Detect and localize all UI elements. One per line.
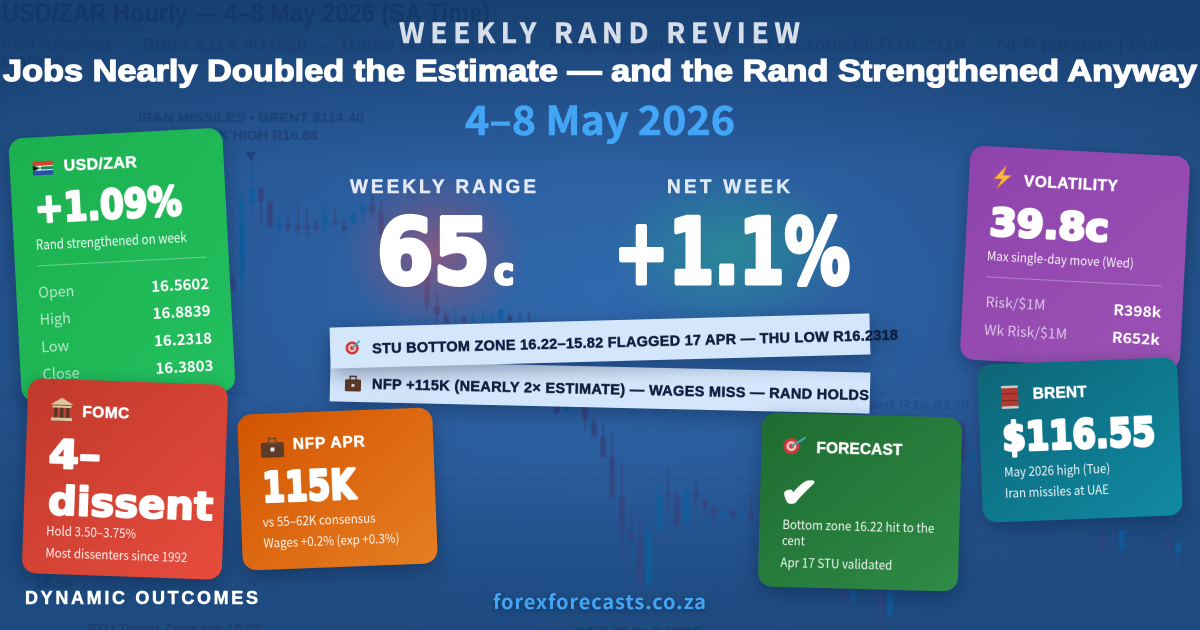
strip: STU bottom zone	[330, 313, 898, 369]
panel: Brent	[977, 357, 1183, 523]
Brent label: BRENT	[1032, 384, 1088, 403]
FOMC value line 2: dissent	[47, 479, 214, 530]
USD/ZAR label: USD/ZAR	[63, 154, 138, 175]
chart axis label: 16.30	[35, 575, 72, 591]
STU text: STU BOTTOM ZONE 16.22–15.82 FLAGGED 17 APR — THU LOW R16.2318	[372, 328, 898, 357]
icon: target	[345, 341, 360, 355]
panel: FOMC	[22, 378, 228, 580]
brand: dynamic outcomes: DYNAMIC OUTCOMES	[25, 588, 258, 608]
volatility table: R398k	[1113, 299, 1162, 323]
icon: briefcase	[261, 438, 284, 458]
volatility label: VOLATILITY	[1023, 173, 1119, 195]
stat: weekly range	[350, 177, 536, 305]
date: 4–8 May 2026	[465, 89, 735, 147]
chart annotation: right edge: nis	[1178, 461, 1200, 476]
forecast detail line 2: cent	[782, 530, 805, 550]
chart subtitle: Iran missiles → Brent $114.40 high → Trump de-escalation → FOMC dissent ruling → STU zone hit R16.2318 → NFP paradox | Source:	[1, 35, 1197, 54]
USD/ZAR table: Close	[42, 362, 80, 385]
footer url: forexforecasts.co.za	[493, 586, 706, 615]
stat: net week	[614, 177, 850, 305]
chart source: OANDA	[1, 52, 66, 71]
NFP detail 1: vs 55–62K consensus	[262, 508, 376, 531]
USD/ZAR table: 16.2318	[153, 327, 213, 351]
FOMC value line 1: 4–	[48, 432, 102, 479]
volatility table: R652k	[1111, 327, 1161, 350]
chart annotation: week high: WK HIGH R16.88	[205, 127, 318, 143]
USD/ZAR table	[38, 273, 214, 385]
chart annotation: iran missiles: IRAN MISSILES • BRENT $114.40	[138, 110, 364, 125]
USD/ZAR table: Low	[41, 335, 70, 357]
NFP label: NFP APR	[292, 433, 365, 453]
forecast detail line 1: Bottom zone 16.22 hit to the	[782, 514, 935, 537]
forecast detail line 3: Apr 17 STU validated	[780, 552, 893, 574]
net week label: NET WEEK	[667, 177, 790, 198]
FOMC detail 1: Hold 3.50–3.75%	[46, 520, 136, 542]
NFP value: 115K	[261, 460, 358, 512]
chart annotation: right edge 2: d	[1183, 479, 1191, 494]
weekly range value: 65	[377, 200, 490, 305]
glow behind net week	[607, 170, 857, 330]
USD/ZAR table: Open	[38, 280, 75, 303]
icon: South African flag	[32, 160, 53, 176]
NFP detail 2: Wages +0.2% (exp +0.3%)	[263, 528, 400, 552]
bullish candles	[242, 165, 1178, 615]
volatility table	[984, 292, 1162, 350]
USD/ZAR table: 16.3803	[155, 355, 214, 379]
NFP text: NFP +115K (NEARLY 2× ESTIMATE) — WAGES MISS — RAND HOLDS	[372, 377, 869, 404]
kicker: weekly rand review: WEEKLY RAND REVIEW	[399, 12, 800, 52]
icon: lightning bolt	[994, 165, 1012, 190]
Brent detail 2: Iran missiles at UAE	[1005, 479, 1109, 502]
panel: NFP APR	[237, 407, 438, 571]
weekly range label: WEEKLY RANGE	[350, 177, 536, 198]
USD/ZAR change: +1.09%	[34, 179, 183, 232]
weekly range unit: c	[494, 252, 514, 293]
icon: target	[783, 437, 806, 455]
chart annotation: closed: Closed R16.5136	[840, 397, 970, 412]
USD/ZAR table: 16.5602	[151, 273, 210, 297]
Brent value: $116.55	[1002, 410, 1156, 461]
Brent detail 1: May 2026 high (Tue)	[1004, 458, 1110, 481]
panel: USD/ZAR	[8, 128, 236, 402]
icon: bank	[50, 397, 74, 421]
headline: Jobs Nearly Doubled the Estimate — and the Rand Strengthened Anyway	[3, 53, 1198, 88]
USD/ZAR table: 16.8839	[152, 300, 211, 324]
bearish candles	[233, 188, 1168, 630]
icon: briefcase	[345, 376, 361, 392]
USD/ZAR caption: Rand strengthened on week	[35, 227, 187, 255]
FOMC label: FOMC	[82, 404, 130, 423]
icon: oil barrel	[1001, 385, 1019, 409]
glow behind weekly range	[343, 170, 527, 334]
chart marker: high	[246, 152, 256, 162]
strip: NFP headline	[330, 360, 870, 414]
chart annotation: close: Close R16.38	[1090, 530, 1178, 545]
FOMC detail 2: Most dissenters since 1992	[45, 542, 188, 566]
panel: forecast	[758, 412, 962, 592]
USD/ZAR table: High	[39, 307, 71, 330]
volatility caption: Max single-day move (Wed)	[987, 245, 1134, 272]
forecast check mark: ✔	[780, 470, 819, 517]
grid lines	[0, 393, 1200, 524]
forecast label: FORECAST	[816, 440, 903, 459]
volatility value: 39.8c	[989, 201, 1110, 250]
panel: volatility	[960, 145, 1190, 371]
volatility table: Wk Risk/$1M	[984, 320, 1068, 344]
net week value: +1.1%	[614, 200, 850, 305]
volatility table: Risk/$1M	[985, 292, 1046, 315]
